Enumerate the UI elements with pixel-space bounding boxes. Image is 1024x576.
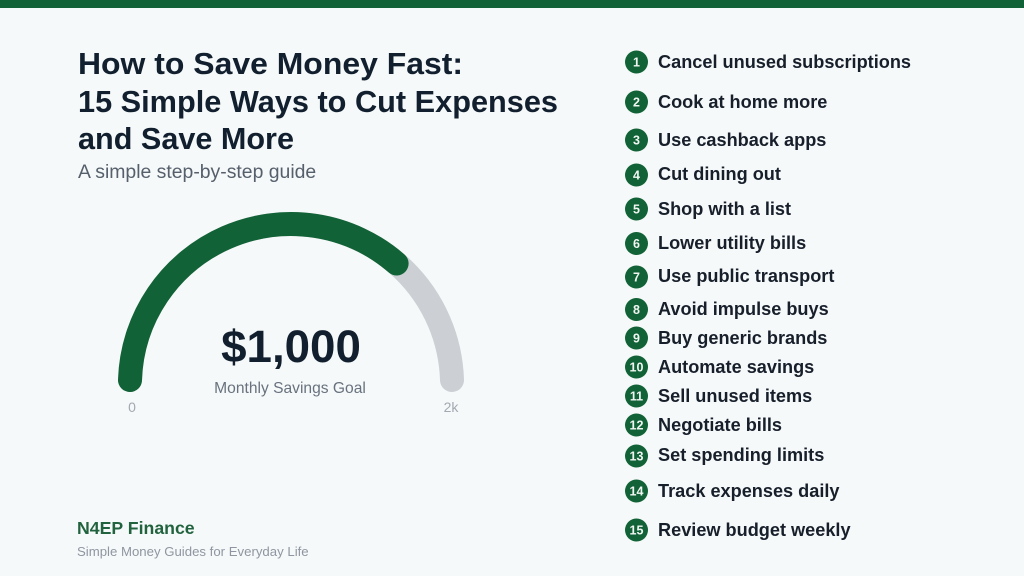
- tip 15: Review budget weekly: [658, 520, 851, 540]
- tip 4: 4: [633, 168, 640, 182]
- tip 14: 14: [630, 484, 643, 498]
- tip 12: [625, 414, 782, 436]
- title: and Save More: [78, 121, 294, 156]
- tip 6: 6: [633, 237, 640, 251]
- tip 5: [625, 198, 791, 220]
- subtitle: A simple step-by-step guide: [78, 161, 316, 183]
- tip 9: 9: [633, 332, 640, 346]
- gauge value: $1,000: [221, 321, 361, 372]
- tip 13: 13: [630, 450, 643, 464]
- tip 1: Cancel unused subscriptions: [658, 52, 911, 72]
- tip 14: Track expenses daily: [658, 481, 840, 501]
- tip 9: Buy generic brands: [658, 328, 827, 348]
- title: [78, 46, 558, 156]
- tips list: [625, 50, 911, 542]
- tip 11: 11: [630, 390, 643, 404]
- tip 11: Sell unused items: [658, 386, 812, 406]
- brand tagline: Simple Money Guides for Everyday Life: [77, 544, 309, 559]
- tip 6: Lower utility bills: [658, 233, 806, 253]
- tip 10: Automate savings: [658, 357, 814, 377]
- tip 8: 8: [633, 303, 640, 317]
- tip 12: Negotiate bills: [658, 415, 782, 435]
- tip 2: Cook at home more: [658, 92, 827, 112]
- tip 1: 1: [633, 56, 640, 70]
- top accent bar: [0, 0, 1024, 8]
- gauge chart: [128, 224, 459, 415]
- tip 3: 3: [633, 134, 640, 148]
- tip 10: 10: [630, 360, 643, 374]
- tip 15: 15: [630, 524, 643, 538]
- tip 12: 12: [630, 418, 643, 432]
- tip 8: Avoid impulse buys: [658, 299, 829, 319]
- title: How to Save Money Fast:: [78, 46, 463, 81]
- brand name: N4EP Finance: [77, 518, 195, 538]
- tip 4: [625, 164, 781, 186]
- gauge label: Monthly Savings Goal: [214, 380, 366, 397]
- tip 2: 2: [633, 96, 640, 110]
- tip 13: Set spending limits: [658, 445, 824, 465]
- gauge minimum: 0: [128, 399, 136, 415]
- tip 3: Use cashback apps: [658, 130, 826, 150]
- gauge progress: [130, 224, 397, 380]
- tip 7: Use public transport: [658, 266, 834, 286]
- gauge maximum: 2k: [444, 399, 459, 415]
- tip 5: 5: [633, 202, 640, 216]
- tip 7: 7: [633, 270, 640, 284]
- title: 15 Simple Ways to Cut Expenses: [78, 84, 558, 119]
- tip 5: Shop with a list: [658, 199, 791, 219]
- gauge track: [130, 224, 452, 380]
- tip 4: Cut dining out: [658, 164, 781, 184]
